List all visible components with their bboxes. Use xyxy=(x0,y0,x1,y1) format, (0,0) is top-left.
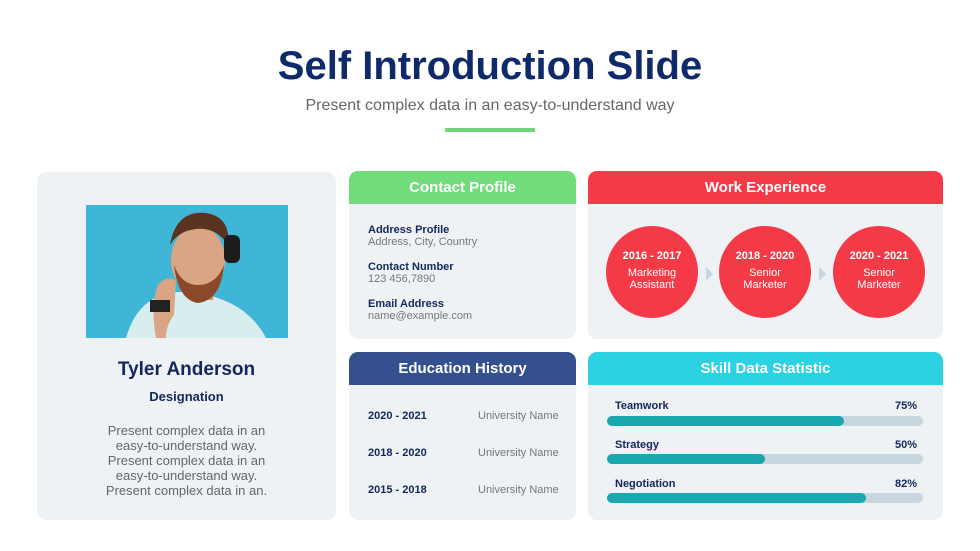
timeline: 2016 - 2017 xyxy=(623,250,681,262)
contact details xyxy=(368,224,478,322)
header xyxy=(588,352,943,385)
contact details: Address Profile xyxy=(368,224,449,236)
panel: profile xyxy=(37,172,336,520)
header xyxy=(349,352,576,385)
panel: skill data statistic xyxy=(588,352,943,520)
skill bars: Negotiation xyxy=(615,478,676,490)
photo xyxy=(86,205,288,338)
title: Self Introduction Slide xyxy=(278,44,702,88)
description: easy-to-understand way. xyxy=(116,468,257,483)
education rows: University Name xyxy=(478,447,559,459)
skill bars xyxy=(607,400,923,503)
contact details: name@example.com xyxy=(368,310,472,322)
header: Skill Data Statistic xyxy=(700,360,831,377)
education rows: 2015 - 2018 xyxy=(368,484,427,496)
timeline: 2020 - 2021 xyxy=(850,250,908,262)
description xyxy=(106,423,267,498)
accent line xyxy=(445,128,535,132)
description: Present complex data in an xyxy=(108,453,265,468)
header: Education History xyxy=(398,360,527,377)
skill bars: 82% xyxy=(895,478,917,490)
timeline: Senior xyxy=(863,267,895,279)
education rows: 2020 - 2021 xyxy=(368,410,427,422)
contact details: Address, City, Country xyxy=(368,236,477,248)
contact details: Email Address xyxy=(368,298,444,310)
contact details: 123 456,7890 xyxy=(368,273,435,285)
education rows: University Name xyxy=(478,410,559,422)
timeline: Marketing xyxy=(628,267,676,279)
timeline: Assistant xyxy=(630,279,674,291)
education rows xyxy=(368,410,559,496)
description: Present complex data in an. xyxy=(106,483,267,498)
panel: education history xyxy=(349,352,576,520)
education rows: 2018 - 2020 xyxy=(368,447,427,459)
timeline: Marketer xyxy=(743,279,787,291)
header: Work Experience xyxy=(705,179,826,196)
designation: Designation xyxy=(149,389,224,404)
panel: contact profile xyxy=(349,171,576,339)
header: Contact Profile xyxy=(409,179,516,196)
panel: work experience xyxy=(588,171,943,339)
skill bars: 50% xyxy=(895,439,917,451)
header xyxy=(349,171,576,204)
header xyxy=(588,171,943,204)
skill bars: Teamwork xyxy=(615,400,669,412)
description: Present complex data in an xyxy=(108,423,265,438)
subtitle: Present complex data in an easy-to-understand way xyxy=(305,97,675,114)
timeline: Senior xyxy=(749,267,781,279)
contact details: Contact Number xyxy=(368,261,454,273)
education rows: University Name xyxy=(478,484,559,496)
description: easy-to-understand way. xyxy=(116,438,257,453)
skill bars: Strategy xyxy=(615,439,659,451)
name: Tyler Anderson xyxy=(118,359,255,380)
timeline: Marketer xyxy=(857,279,901,291)
skill bars: 75% xyxy=(895,400,917,412)
timeline xyxy=(606,226,925,318)
timeline: 2018 - 2020 xyxy=(736,250,794,262)
